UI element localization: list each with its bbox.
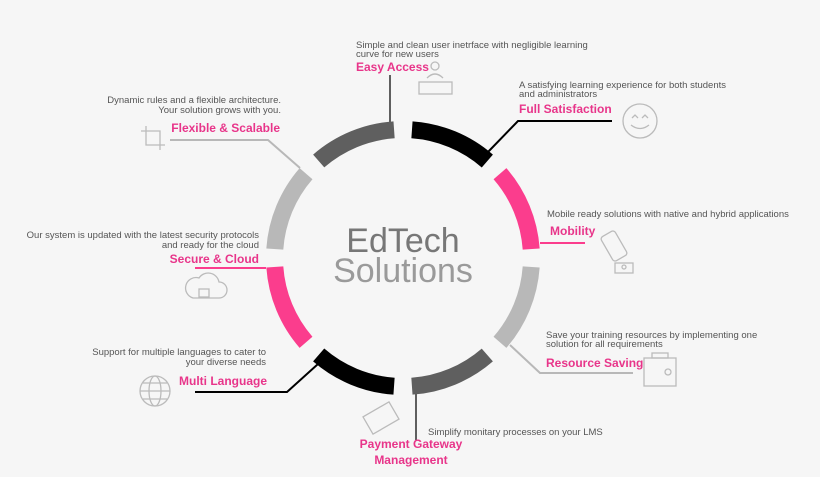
- item: Multi Language: your diverse needs: [186, 357, 266, 368]
- item: Mobility: Mobility: [550, 224, 596, 238]
- item: Payment Gateway: Simplify monitary processes on your LMS: [428, 427, 603, 438]
- item: Full Satisfaction: [519, 80, 726, 138]
- item: Flexible & Scalable: Your solution grows with you.: [158, 105, 281, 116]
- item: Flexible & Scalable: [107, 95, 281, 150]
- item: Resource Saving: solution for all requirements: [546, 339, 663, 350]
- item: Mobility: [547, 209, 789, 273]
- ring segments: [222, 77, 584, 439]
- item: Easy Access: [356, 40, 588, 94]
- item: Multi Language: [92, 347, 267, 406]
- item: Resource Saving: Resource Saving: [546, 356, 643, 370]
- item: Mobility: Mobile ready solutions with native and hybrid applications: [547, 209, 789, 220]
- item: Multi Language: Multi Language: [179, 374, 267, 388]
- item: Full Satisfaction: and administrators: [519, 89, 597, 100]
- item: Easy Access: Easy Access: [356, 60, 429, 74]
- connector lines: [170, 75, 633, 440]
- item: Resource Saving: Save your training resources by implementing one: [546, 330, 757, 341]
- center title: [333, 222, 473, 290]
- item: Payment Gateway: Management: [374, 453, 448, 467]
- item: Secure & Cloud: Secure & Cloud: [170, 252, 259, 266]
- item: Full Satisfaction: A satisfying learning experience for both students: [519, 80, 726, 91]
- item: Multi Language: Support for multiple languages to cater to: [92, 347, 266, 358]
- item: Full Satisfaction: Full Satisfaction: [519, 102, 612, 116]
- item: Flexible & Scalable: Flexible & Scalable: [171, 121, 280, 135]
- item: Payment Gateway: [360, 402, 603, 467]
- item: Secure & Cloud: [27, 230, 259, 298]
- item: Flexible & Scalable: Dynamic rules and a flexible architecture.: [107, 95, 281, 106]
- item: Easy Access: Simple and clean user inetrface with negligible learning: [356, 40, 588, 51]
- center title: EdTech: [346, 222, 460, 260]
- item: Secure & Cloud: Our system is updated with the latest security protocols: [27, 230, 259, 241]
- center title: Solutions: [333, 252, 473, 290]
- item: Easy Access: curve for new users: [356, 49, 439, 60]
- item: Secure & Cloud: and ready for the cloud: [162, 240, 259, 251]
- item: Payment Gateway: Payment Gateway: [360, 437, 463, 451]
- item: Resource Saving: [546, 330, 757, 386]
